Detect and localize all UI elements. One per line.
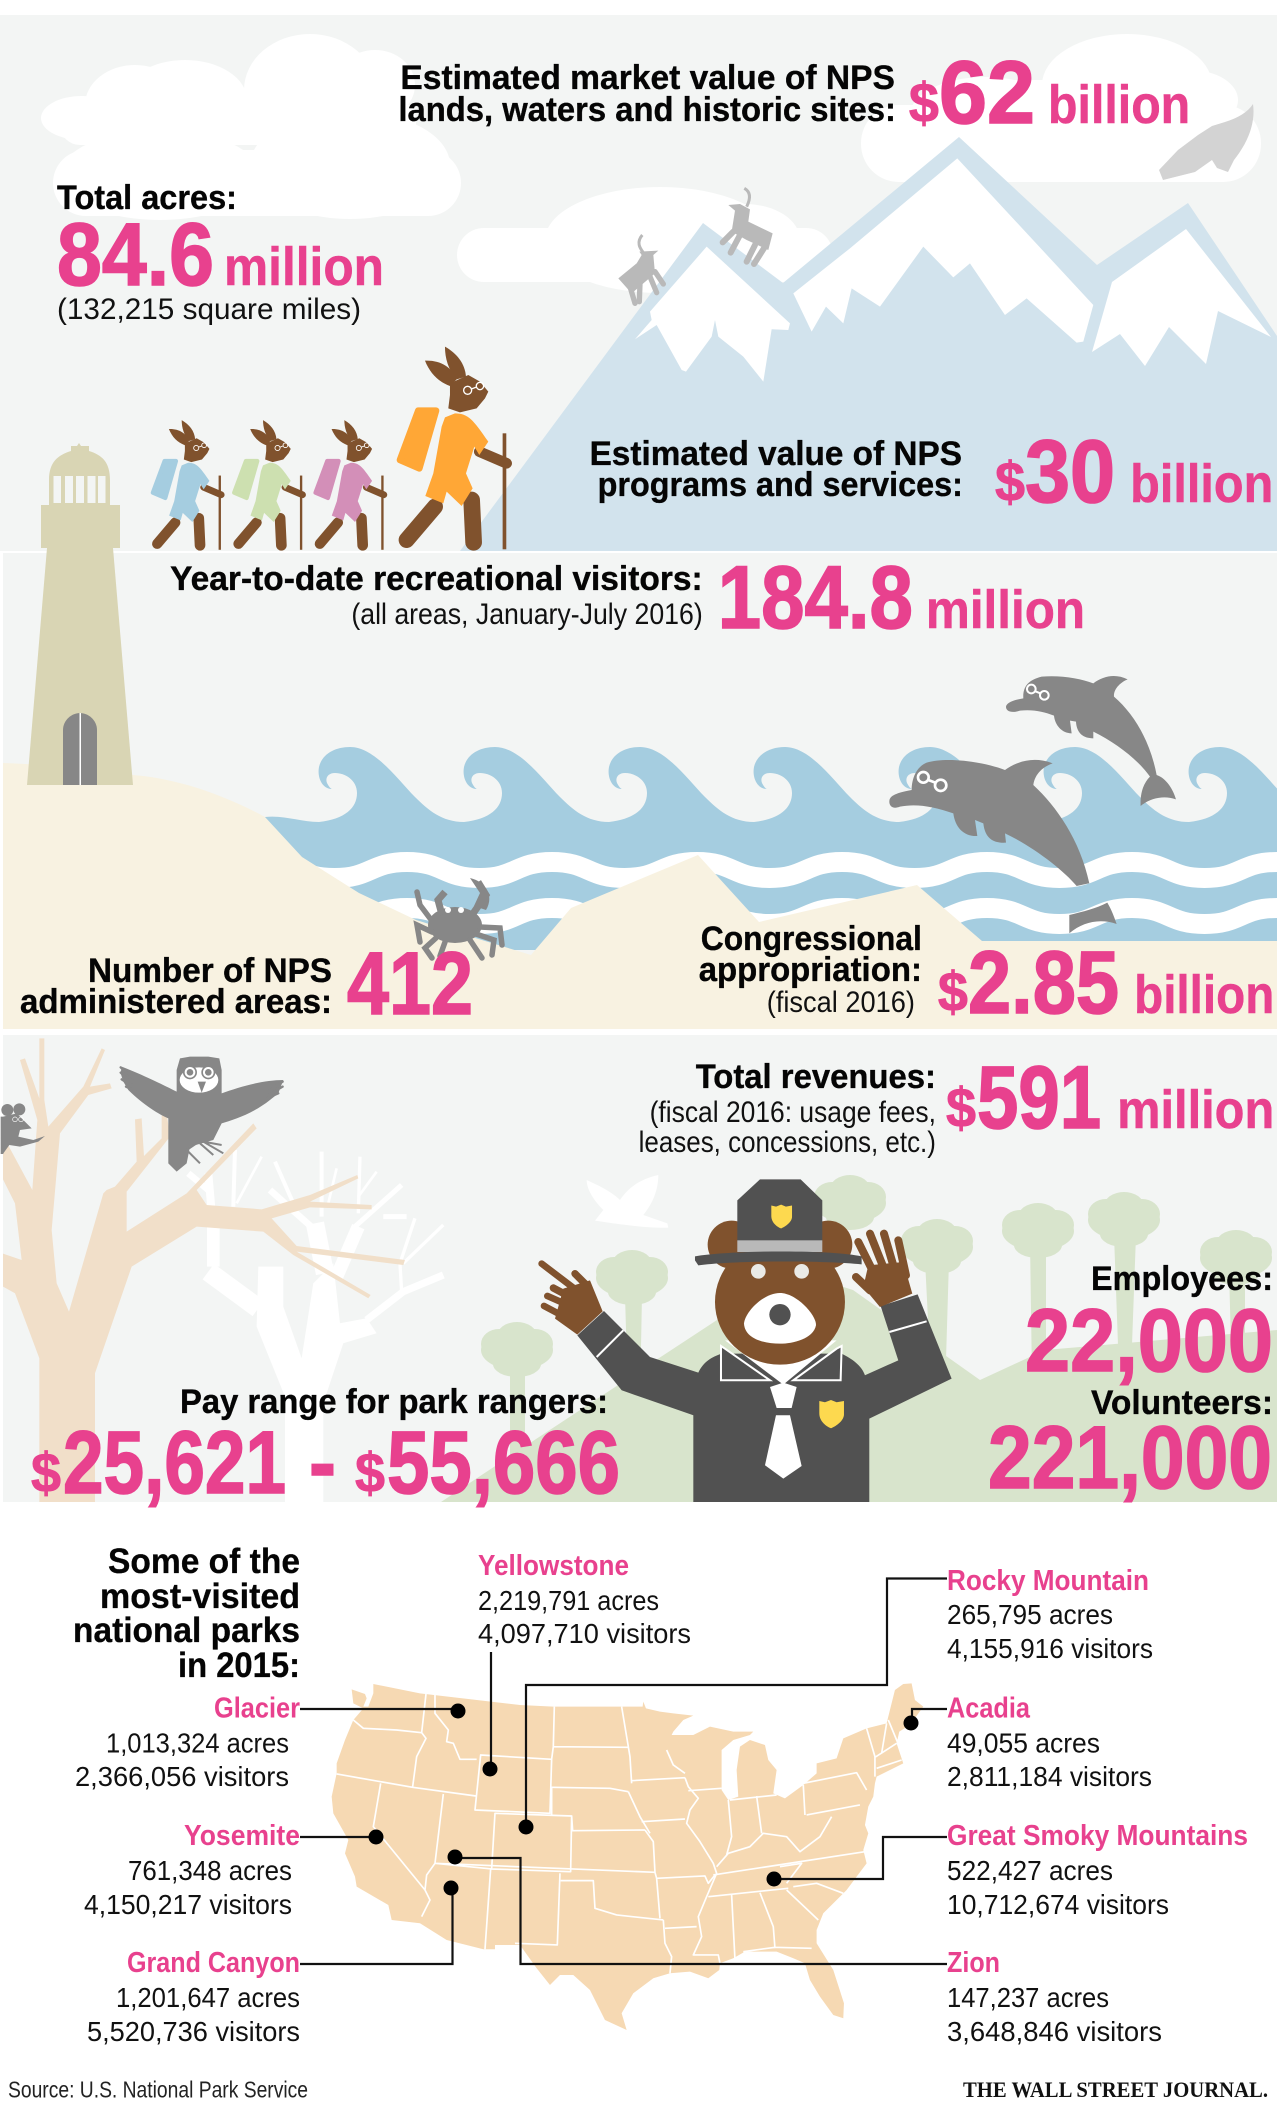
stat: revenues: leases, concessions, etc.) — [639, 1126, 936, 1159]
stat: areas: 412 — [347, 933, 473, 1033]
park: Grand Canyon: 1,201,647 acres — [116, 1982, 300, 2013]
source: Source: U.S. National Park Service — [8, 2076, 308, 2102]
park: Yellowstone — [478, 1550, 691, 1649]
park: Zion: 3,648,846 visitors — [947, 2016, 1162, 2047]
leader lines and park dots — [300, 1578, 947, 1964]
stat: revenues: (fiscal 2016: usage fees, — [650, 1096, 936, 1129]
park: Yosemite: Yosemite — [184, 1820, 300, 1852]
clouds — [41, 34, 1261, 293]
stat: total acres: 84.6 — [57, 204, 214, 304]
park: Great Smoky Mountains: Great Smoky Mountains — [947, 1820, 1248, 1852]
park: Yosemite: 4,150,217 visitors — [84, 1889, 292, 1920]
mountains — [460, 137, 1277, 551]
park: Acadia — [947, 1692, 1152, 1792]
stat: areas — [20, 933, 473, 1033]
stat: revenues: Total revenues: — [696, 1058, 936, 1096]
stat: appropriation: 2.85 — [968, 932, 1119, 1032]
icon: hiking rabbits — [153, 347, 507, 550]
stat: appropriation — [699, 920, 1274, 1032]
waves — [265, 747, 1280, 950]
stat: pay range: $ — [355, 1441, 385, 1504]
park: Great Smoky Mountains: 522,427 acres — [947, 1855, 1113, 1886]
jacket — [577, 1294, 952, 1502]
stat: volunteers: Volunteers: — [1091, 1384, 1273, 1422]
panel: land and mountains — [0, 15, 1277, 551]
park: Rocky Mountain — [947, 1565, 1153, 1664]
head — [708, 1221, 756, 1269]
park: Rocky Mountain: 265,795 acres — [947, 1599, 1113, 1630]
tan tree — [0, 1038, 405, 1503]
icon: eagle — [1159, 104, 1254, 180]
stat: appropriation: (fiscal 2016) — [767, 986, 915, 1019]
park: Yellowstone: Yellowstone — [478, 1550, 629, 1582]
icon: lighthouse — [27, 443, 133, 785]
map: contiguous United States — [332, 1683, 923, 2030]
heading: most-visited parks: in 2015: — [178, 1646, 300, 1685]
stat: pay range: $ — [31, 1441, 61, 1504]
stat: programs value: Estimated value of NPS — [590, 435, 962, 473]
panel: forest — [0, 1035, 1277, 1503]
stat: total acres: million — [224, 237, 384, 297]
stat: appropriation: Congressional — [701, 920, 922, 958]
park: Zion: Zion — [947, 1947, 1000, 1979]
collar — [725, 1340, 837, 1385]
stat: market value: Estimated market value of NPS — [400, 59, 895, 97]
heading: most-visited parks: Some of the — [108, 1542, 300, 1581]
park: Glacier: Glacier — [214, 1692, 300, 1724]
park: Glacier: 2,366,056 visitors — [75, 1761, 289, 1792]
icon: crab — [417, 878, 502, 958]
stat: visitors: Year-to-date recreational visitors: — [170, 560, 703, 598]
park: Great Smoky Mountains: 10,712,674 visitors — [947, 1889, 1169, 1920]
icon: ranger bear — [542, 1179, 952, 1502]
icon: owl — [121, 1057, 283, 1172]
park: Acadia: 2,811,184 visitors — [947, 1761, 1152, 1792]
icon: dolphins — [889, 676, 1176, 933]
park: Acadia: Acadia — [947, 1692, 1031, 1724]
stat: market value — [398, 42, 1190, 142]
park: Grand Canyon — [87, 1947, 300, 2047]
stat: pay range: Pay range for park rangers: — [180, 1383, 608, 1421]
stat: revenues — [639, 1047, 1274, 1159]
stat: employees: Employees: — [1091, 1260, 1273, 1298]
park: Grand Canyon: Grand Canyon — [127, 1947, 300, 1979]
park: Acadia: 49,055 acres — [947, 1728, 1100, 1758]
stat: pay range: - — [309, 1412, 336, 1512]
state borders — [337, 1694, 902, 1973]
heading: most-visited parks: national parks — [73, 1611, 300, 1650]
stat: pay range — [31, 1383, 620, 1512]
sand — [3, 763, 1277, 1029]
tie — [765, 1383, 802, 1479]
snow caps — [635, 158, 1093, 382]
stat: total acres: (132,215 square miles) — [57, 293, 361, 326]
park: Rocky Mountain: 4,155,916 visitors — [947, 1633, 1153, 1664]
park: Grand Canyon: 5,520,736 visitors — [87, 2016, 300, 2047]
park: Yellowstone: 4,097,710 visitors — [478, 1618, 691, 1649]
icon: white bird — [587, 1175, 668, 1228]
stat: areas: administered areas: — [20, 983, 332, 1021]
stat: total acres: Total acres: — [57, 179, 237, 217]
park: Yosemite: 761,348 acres — [128, 1855, 292, 1886]
stat: pay range: 55,666 — [387, 1412, 620, 1512]
stat: market value: lands, waters and historic sites: — [398, 91, 896, 129]
stat: revenues: $ — [946, 1076, 976, 1139]
stat: programs value: 30 — [1025, 421, 1115, 521]
park: Yosemite — [84, 1820, 300, 1920]
hat — [737, 1179, 822, 1242]
stat: programs value: $ — [995, 450, 1025, 513]
park: Zion — [947, 1947, 1162, 2047]
stat: revenues: 591 — [977, 1047, 1101, 1147]
pointing hand — [542, 1264, 588, 1318]
stat: programs value — [590, 421, 1273, 521]
green trees — [441, 1175, 1277, 1502]
white tree — [188, 1150, 443, 1503]
park: Yellowstone: 2,219,791 acres — [478, 1585, 659, 1616]
park: Great Smoky Mountains — [947, 1820, 1248, 1920]
stat: pay range: 25,621 — [63, 1412, 286, 1512]
credit: The Wall Street Journal: THE WALL STREET JOURNAL. — [963, 2077, 1268, 2102]
park: Glacier: 1,013,324 acres — [106, 1728, 289, 1758]
stat: visitors: million — [926, 580, 1085, 640]
icon: deer — [618, 188, 773, 303]
stat: total acres — [57, 179, 384, 326]
park: Rocky Mountain: Rocky Mountain — [947, 1565, 1149, 1597]
icon: mouse — [1, 1103, 45, 1154]
park: Glacier — [75, 1692, 300, 1792]
stat: appropriation: $ — [938, 960, 968, 1023]
stat: programs value: programs and services: — [598, 466, 963, 504]
park: Zion: 147,237 acres — [947, 1982, 1109, 2013]
waving hand — [856, 1234, 906, 1290]
heading: most-visited parks: most-visited — [100, 1577, 300, 1616]
stat: areas: Number of NPS — [88, 952, 332, 990]
stat: appropriation: appropriation: — [699, 951, 922, 989]
stat: visitors: 184.8 — [718, 547, 913, 647]
panel: coast and sea — [3, 553, 1280, 1029]
stat: market value: $ — [909, 71, 939, 134]
stat: visitors — [170, 547, 1085, 647]
stat: visitors: (all areas, January-July 2016) — [351, 598, 703, 631]
stat: market value: 62 — [939, 42, 1035, 142]
stat: market value: billion — [1048, 75, 1190, 135]
hills — [441, 1270, 1277, 1502]
heading: most-visited parks — [73, 1542, 300, 1685]
